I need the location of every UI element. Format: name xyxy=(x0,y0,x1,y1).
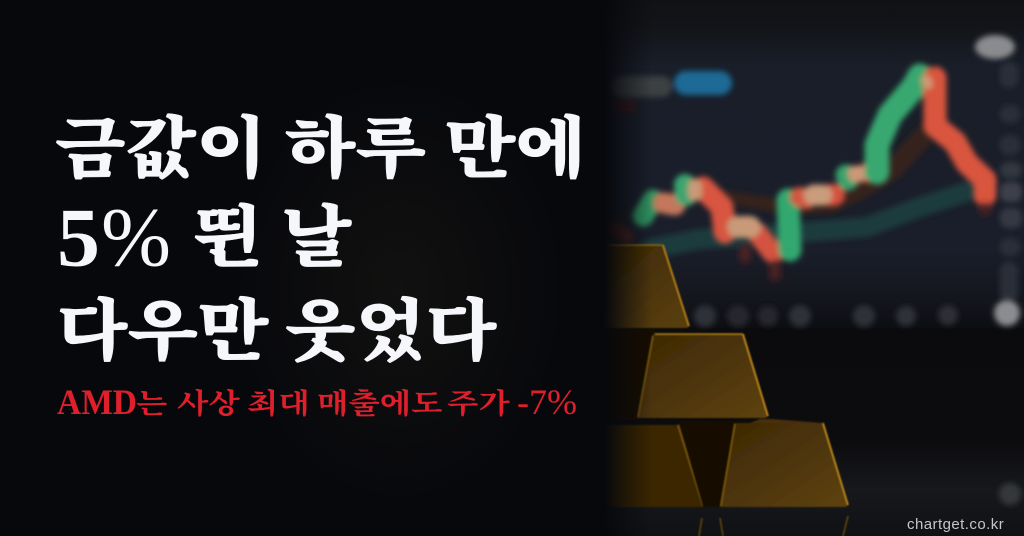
gold bar: middle xyxy=(638,334,768,418)
title line 1: 하루 xyxy=(285,112,426,187)
chart: teal moving average band xyxy=(650,190,972,249)
title line 2: 날 xyxy=(281,201,352,276)
chart: blurred candlesticks xyxy=(614,76,985,253)
chart: wicks xyxy=(745,204,985,280)
background: left dark fade xyxy=(590,0,652,536)
chart: blurred time axis dots xyxy=(694,300,1021,505)
title line 2: 5 xyxy=(57,192,100,284)
gold bar: table reflection xyxy=(699,516,848,536)
title xyxy=(55,112,586,369)
gold bar: top xyxy=(598,245,689,328)
chart: blurred label pills xyxy=(610,35,1015,113)
chart: blurred price axis xyxy=(1000,62,1022,302)
background: faint warm glow xyxy=(230,70,570,510)
gold bar: lower left xyxy=(598,425,703,507)
chart: brown moving average band xyxy=(720,120,932,214)
title line 3: 다우만 xyxy=(57,295,269,369)
subtitle: 사상 xyxy=(177,388,241,419)
subtitle: 최대 xyxy=(247,388,310,419)
title line 1: 금값이 xyxy=(55,112,267,187)
subtitle xyxy=(57,382,577,422)
title line 1: 만에 xyxy=(445,112,586,187)
icon: stacked gold bars xyxy=(598,245,848,536)
subtitle: 주가 xyxy=(447,388,511,419)
subtitle: AMD xyxy=(57,382,137,422)
watermark: chartget.co.kr xyxy=(907,516,1004,533)
subtitle: -7% xyxy=(517,382,577,422)
subtitle: 는 xyxy=(136,388,167,419)
title line 2: 뛴 xyxy=(192,201,263,276)
title line 2 xyxy=(57,192,352,284)
gold bar: lower right xyxy=(720,419,848,507)
subtitle: 매출에도 xyxy=(317,388,443,419)
title line 3: 웃었다 xyxy=(285,295,497,369)
background: blurred trading screen xyxy=(590,0,1024,536)
gold bar: gap shadow xyxy=(598,330,655,420)
title line 2: % xyxy=(101,192,171,284)
gold bar: gap shadow lower xyxy=(678,421,735,507)
